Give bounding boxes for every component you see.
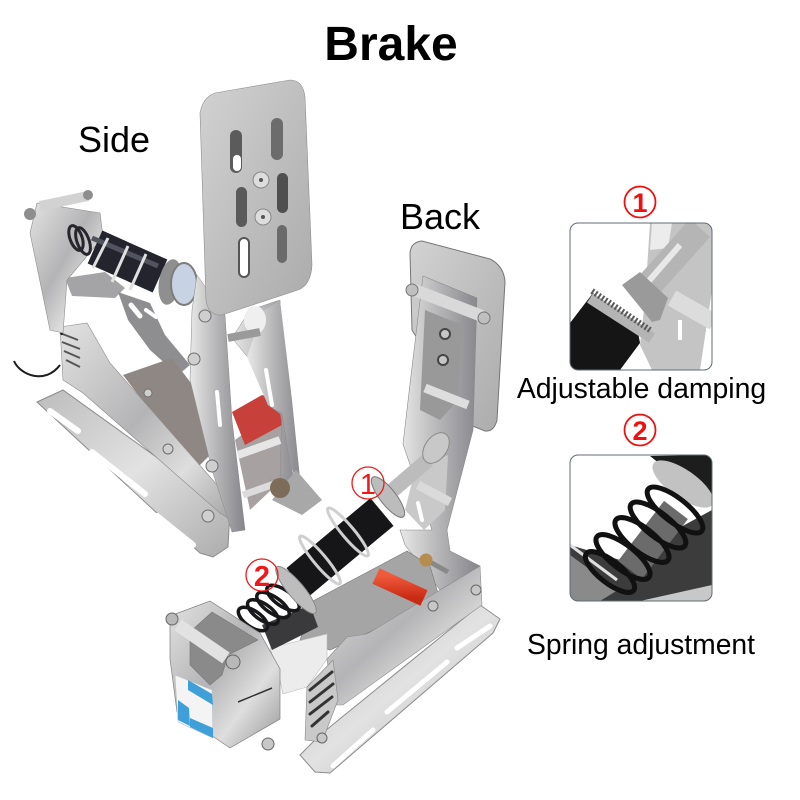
spring bbox=[234, 581, 303, 635]
heading marker 2 bbox=[624, 414, 656, 446]
heading marker 2: 2 bbox=[632, 416, 648, 446]
base plate bbox=[300, 605, 500, 773]
damper bbox=[92, 238, 197, 307]
sticker bbox=[175, 675, 213, 738]
upper link and slotted link bbox=[65, 272, 190, 375]
heading marker 1: 1 bbox=[632, 188, 648, 218]
vent piece bbox=[305, 660, 338, 742]
caption: spring adjustment: Spring adjustment bbox=[527, 628, 755, 660]
brass nut bbox=[420, 554, 448, 572]
panel: adjustable damping close-up bbox=[570, 223, 714, 370]
red part bbox=[232, 395, 282, 445]
cable bbox=[14, 280, 62, 376]
rear arm blade bbox=[247, 300, 302, 498]
caption: adjustable damping: Adjustable damping bbox=[517, 373, 766, 405]
marker 2 on pedal: 2 bbox=[254, 561, 270, 593]
side bracket bbox=[60, 323, 243, 528]
pedal plate bbox=[200, 80, 312, 315]
white bar bbox=[270, 634, 327, 694]
cross rods bbox=[228, 332, 290, 498]
back view pedal illustration bbox=[166, 241, 505, 773]
arm slots bbox=[217, 370, 272, 425]
side view pedal illustration bbox=[14, 80, 322, 557]
bolts bbox=[144, 310, 218, 522]
hinge roller bbox=[24, 190, 93, 220]
base plate bbox=[37, 390, 230, 557]
dark wedge bbox=[262, 605, 318, 650]
arm slots bbox=[418, 503, 465, 533]
damper bbox=[271, 472, 410, 618]
arm bbox=[400, 276, 480, 590]
marker 2 on pedal bbox=[246, 559, 278, 593]
panel: spring adjustment close-up bbox=[570, 452, 721, 601]
hinge bracket bbox=[30, 203, 103, 333]
screws bbox=[262, 585, 481, 750]
foot bracket bbox=[272, 470, 322, 515]
end block bbox=[166, 601, 280, 748]
back view label: Back bbox=[400, 196, 481, 237]
rear arm bbox=[232, 300, 300, 505]
side view label: Side bbox=[78, 119, 150, 160]
red handle bbox=[376, 576, 424, 598]
tray bbox=[300, 551, 440, 650]
front arm bbox=[190, 275, 245, 532]
vent slots bbox=[60, 333, 80, 367]
adjuster nuts bbox=[438, 329, 450, 365]
heading marker 1 bbox=[624, 186, 656, 218]
lower arm rod bbox=[425, 388, 468, 405]
inner cavity bbox=[405, 455, 448, 530]
right bracket bbox=[327, 566, 482, 705]
title: Brake bbox=[324, 18, 458, 71]
marker 1 on pedal bbox=[352, 467, 384, 501]
arm top roller bbox=[406, 284, 490, 324]
marker 1 on pedal: 1 bbox=[360, 469, 376, 501]
inner dark block bbox=[123, 358, 215, 470]
ball joint and rod bbox=[393, 428, 455, 502]
roller bbox=[244, 306, 266, 334]
spring bbox=[66, 224, 93, 256]
inner gray fill bbox=[235, 405, 292, 510]
pedal plate bbox=[410, 241, 505, 431]
arm inner panel bbox=[420, 310, 462, 420]
